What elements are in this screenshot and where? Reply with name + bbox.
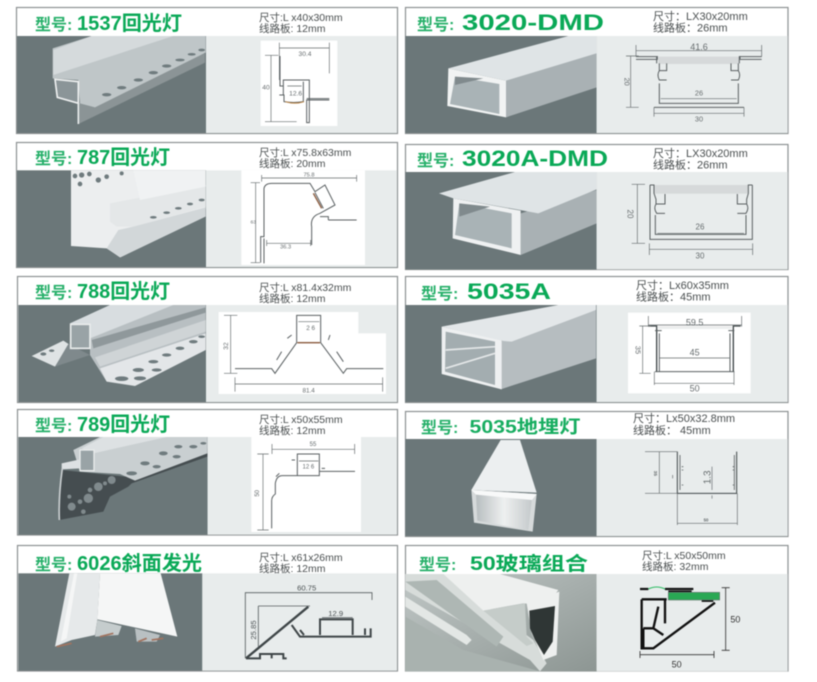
specs: 789: 尺寸:L x50x55mm xyxy=(259,414,343,426)
specs: 3020-DMD: 线路板：26mm xyxy=(653,20,728,34)
panel: model 788 xyxy=(18,276,398,402)
product photo: 788 xyxy=(18,305,206,402)
specs: 787: 尺寸:L x75.8x63mm xyxy=(259,147,351,159)
product photo: 6026 xyxy=(18,573,202,671)
dimension drawing: 3020-DMD: 26 xyxy=(695,88,703,97)
dimension drawing: 3020-DMD: 20 xyxy=(622,78,631,86)
heading: 1537: 型号: xyxy=(35,16,72,34)
dimension drawing: 5035A: 45 xyxy=(690,348,700,358)
heading: 50 glass: 50玻璃组合 xyxy=(470,553,588,575)
specs: 3020-DMD: 尺寸：LX30x20mm xyxy=(653,11,748,23)
dimension drawing: 6026: 12.9 xyxy=(328,609,343,618)
panel: model 3020A-DMD xyxy=(405,144,788,270)
heading: 789: 789回光灯 xyxy=(77,413,170,436)
dimension drawing: 6026: 25.85 xyxy=(249,620,258,640)
dimension drawing: 788: 2 6 xyxy=(306,325,316,332)
heading: 787: 型号: xyxy=(35,150,72,168)
panel: model 50 glass xyxy=(405,546,788,671)
dimension drawing: 3020A-DMD: 20 xyxy=(625,210,634,219)
dimension drawing: 3020-DMD xyxy=(597,36,788,133)
dimension drawing: 1537: 12.6 xyxy=(289,90,302,97)
product photo: 3020-DMD xyxy=(405,36,597,133)
dimension drawing: 789 xyxy=(208,437,397,535)
dimension drawing: 50 glass: 50 xyxy=(672,659,682,669)
dimension drawing: 50 glass: 50 xyxy=(730,614,740,624)
panel: model 5035 inground xyxy=(405,411,788,536)
product photo: 50 glass xyxy=(405,574,597,671)
specs: 788: 线路板: 12mm xyxy=(259,292,326,305)
heading: 789: 型号: xyxy=(35,417,72,435)
specs: 1537: 尺寸:L x40x30mm xyxy=(259,12,343,24)
specs: 788: 尺寸:L x81.4x32mm xyxy=(259,282,351,294)
specs: 3020A-DMD: 尺寸：LX30x20mm xyxy=(653,148,748,160)
product photo: 5035A xyxy=(405,305,597,402)
dimension drawing: 3020-DMD: 41.6 xyxy=(690,42,708,52)
specs: 50 glass: 尺寸:L x50x50mm xyxy=(642,550,726,562)
dimension drawing: 5035A: 59.5 xyxy=(686,318,703,328)
dimension drawing: 787: 63 xyxy=(251,219,256,225)
specs: 5035A: 线路板：45mm xyxy=(636,290,711,304)
specs: 5035A: 尺寸：Lx60x35mm xyxy=(636,280,729,292)
dimension drawing: 787: 75.8 xyxy=(303,173,315,179)
panel: model 6026 xyxy=(18,546,398,671)
dimension drawing: 787 xyxy=(206,170,397,267)
heading: 5035 inground: 5035地埋灯 xyxy=(470,417,580,437)
panel: model 1537 xyxy=(16,8,398,134)
dimension drawing: 3020A-DMD: 30 xyxy=(696,252,705,261)
dimension drawing: 3020-DMD: 30 xyxy=(695,114,703,123)
dimension drawing: 1537 xyxy=(206,36,397,133)
dimension drawing: 6026 xyxy=(202,573,397,671)
dimension drawing: 3020A-DMD: 26 xyxy=(696,223,705,232)
heading: 1537: 1537回光灯 xyxy=(77,12,182,35)
specs: 6026: 线路板: 12mm xyxy=(259,562,326,575)
dimension drawing: 787: 36.3 xyxy=(280,244,291,250)
dimension drawing: 3020A-DMD xyxy=(597,172,788,269)
specs: 3020A-DMD: 线路板：26mm xyxy=(653,158,728,172)
product photo: 789 xyxy=(18,437,208,535)
dimension drawing: 1537: 40 xyxy=(262,84,270,91)
heading: 6026: 型号: xyxy=(35,556,72,574)
dimension drawing: 789: 50 xyxy=(255,489,261,497)
heading: 787: 787回光灯 xyxy=(77,146,170,169)
dimension drawing: 5035 inground xyxy=(597,439,788,536)
dimension drawing: 1537: 30.4 xyxy=(299,51,312,58)
dimension drawing: 5035A xyxy=(597,305,788,402)
heading: 5035A: 型号: xyxy=(421,285,458,303)
product photo: 1537 xyxy=(17,36,206,133)
heading: 5035 inground: 型号: xyxy=(421,419,458,437)
specs: 1537: 线路板: 12mm xyxy=(259,22,326,35)
heading: 788: 788回光灯 xyxy=(77,280,170,303)
dimension drawing: 5035A: 50 xyxy=(690,383,700,393)
heading: 3020-DMD: 型号: xyxy=(417,16,454,34)
dimension drawing: 5035 inground: 50 xyxy=(704,518,709,523)
heading: 3020-DMD: 3020-DMD xyxy=(462,10,604,35)
specs: 5035 inground: 线路板： 45mm xyxy=(633,423,711,437)
specs: 787: 线路板: 20mm xyxy=(259,157,326,170)
dimension drawing: 50 glass xyxy=(597,574,788,671)
heading: 3020A-DMD: 3020A-DMD xyxy=(462,146,608,171)
specs: 789: 线路板: 12mm xyxy=(259,424,326,437)
dimension drawing: 5035A: 35 xyxy=(633,346,642,354)
dimension drawing: 789: 12 6 xyxy=(303,465,315,471)
specs: 50 glass: 线路板: 32mm xyxy=(642,560,709,573)
panel: model 3020-DMD xyxy=(405,8,788,134)
heading: 6026: 6026斜面发光 xyxy=(77,552,202,575)
specs: 5035 inground: 尺寸：Lx50x32.8mm xyxy=(633,413,735,425)
panel: model 787 xyxy=(16,142,398,268)
product photo: 5035 inground xyxy=(405,439,597,536)
product photo: 787 xyxy=(17,170,206,267)
dimension drawing: 5035 inground: 1.3 xyxy=(702,470,713,484)
dimension drawing: 788: 81.4 xyxy=(302,387,315,394)
dimension drawing: 788: 32 xyxy=(223,342,230,350)
heading: 788: 型号: xyxy=(35,284,72,302)
heading: 50 glass: 型号: xyxy=(419,556,456,574)
dimension drawing: 5035 inground: 35 xyxy=(653,471,658,476)
heading: 5035A: 5035A xyxy=(467,279,551,304)
product photo: 3020A-DMD xyxy=(405,172,597,269)
panel: model 5035A xyxy=(405,276,788,402)
panel: model 789 xyxy=(18,410,398,535)
heading: 3020A-DMD: 型号: xyxy=(417,152,454,170)
dimension drawing: 6026: 60.75 xyxy=(297,584,316,593)
dimension drawing: 789: 55 xyxy=(310,442,317,448)
specs: 6026: 尺寸:L x61x26mm xyxy=(259,552,343,564)
dimension drawing: 788 xyxy=(206,305,397,402)
